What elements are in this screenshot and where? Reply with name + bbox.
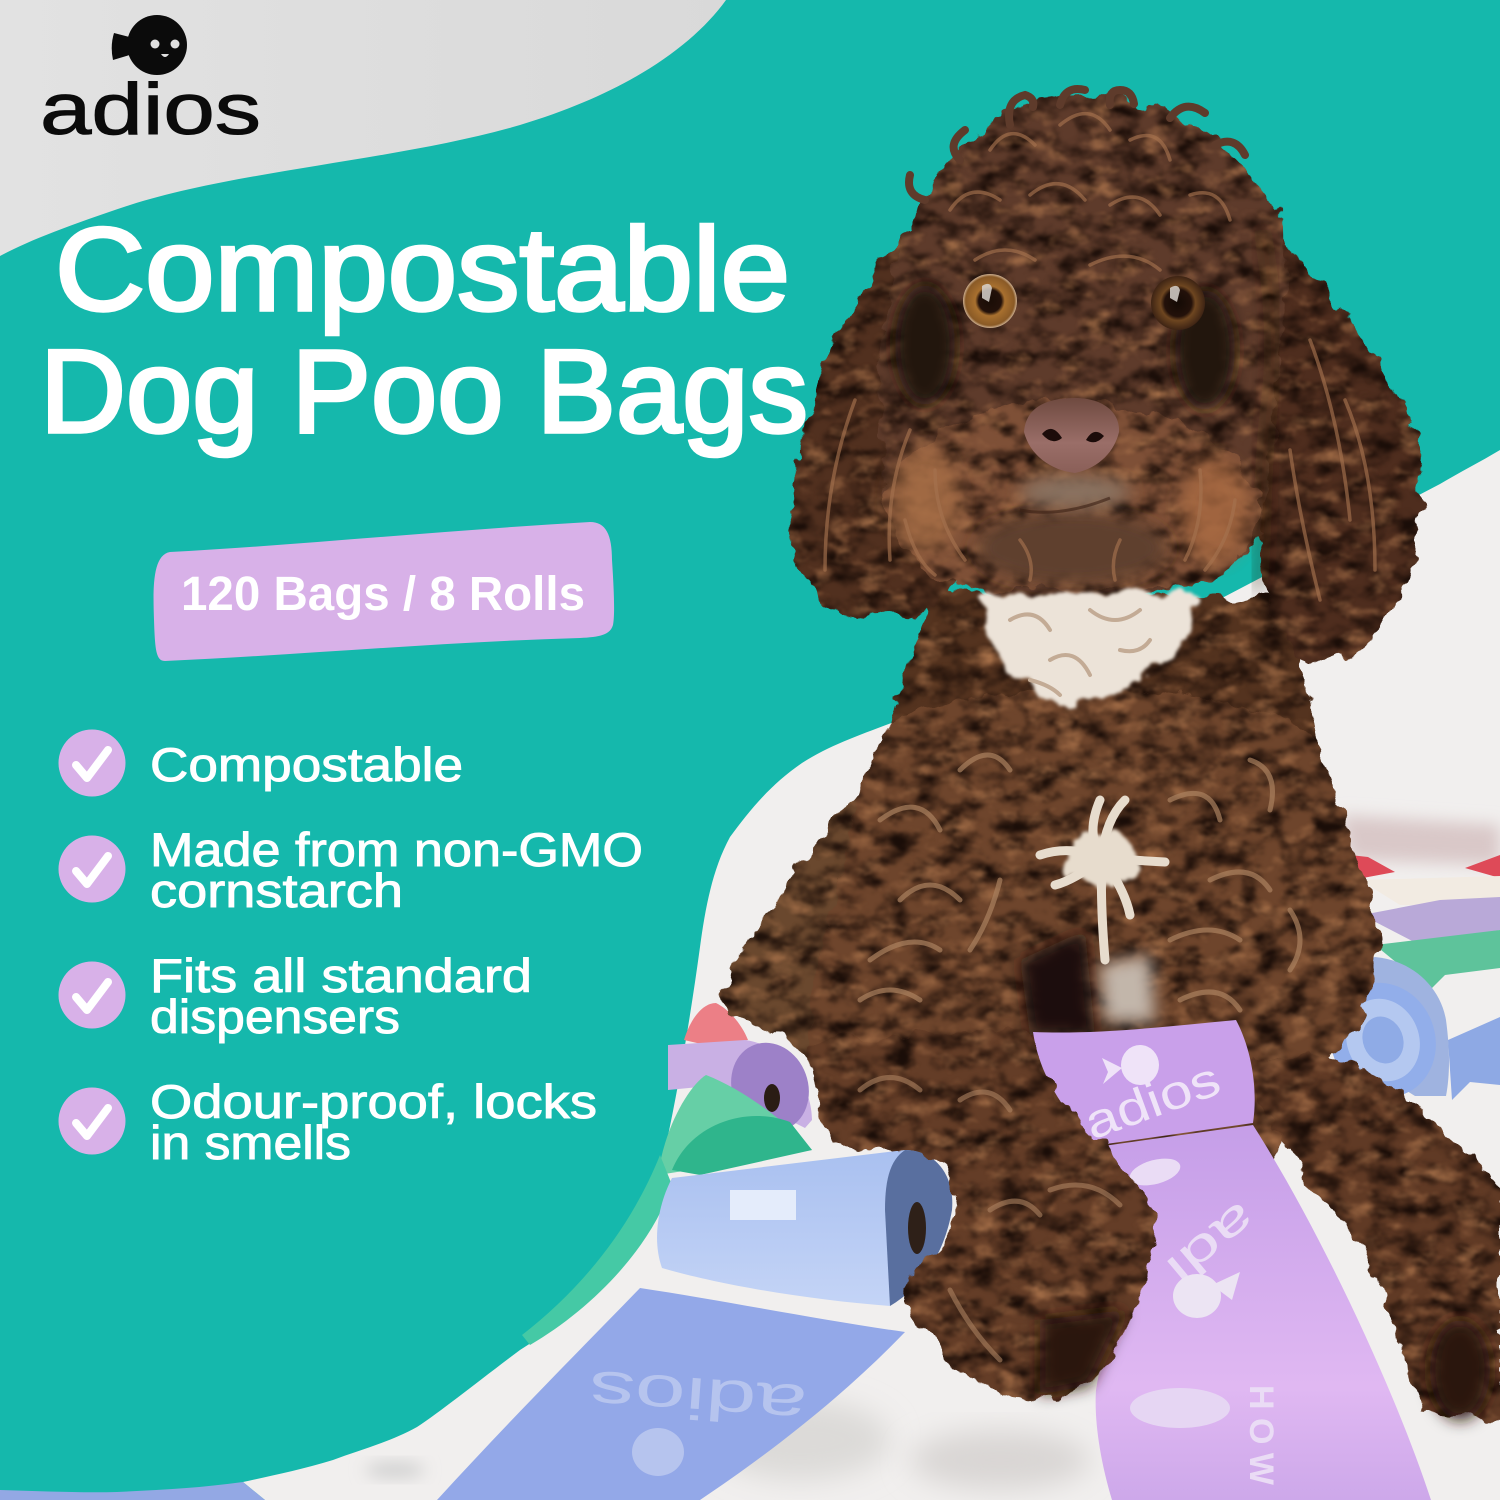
big purple roll <box>1033 1020 1255 1150</box>
grey top-left wave <box>0 0 726 256</box>
rear body and haunch <box>716 780 960 1060</box>
feature: compostable <box>58 730 463 796</box>
right eye <box>1151 276 1205 330</box>
blue bag strip <box>437 1288 905 1500</box>
grey lip fur <box>1020 476 1130 508</box>
side print: HOW <box>1242 1385 1280 1486</box>
toe shadow <box>1040 1310 1125 1395</box>
neck <box>880 590 1320 760</box>
feature list <box>58 730 643 1169</box>
left front leg and paw <box>809 1030 1156 1400</box>
feature: compostable: Compostable <box>150 738 463 791</box>
chin <box>977 512 1167 584</box>
white blanket and cushion photo area <box>0 450 1500 1500</box>
fish icon <box>112 15 187 75</box>
head fur strands <box>825 114 1375 600</box>
head and curls <box>881 94 1286 600</box>
lilac bag strip back right <box>1362 897 1500 945</box>
feature: fits dispensers: dispensers <box>150 990 400 1043</box>
low white patch <box>1100 955 1155 1022</box>
right paw shadow <box>1430 1320 1490 1420</box>
nose <box>1024 398 1119 473</box>
muzzle <box>885 400 1262 591</box>
chest tan strands <box>1010 610 1150 695</box>
blanket shadow left <box>710 1400 890 1480</box>
feature: non-GMO cornstarch <box>58 823 643 917</box>
dog <box>716 89 1500 1420</box>
feature: odour-proof <box>58 1075 597 1169</box>
fish print large <box>1173 1274 1221 1318</box>
cream blanket band <box>1360 876 1500 905</box>
feature: non-GMO cornstarch: Made from non-GMO <box>150 823 643 876</box>
roll rings <box>1313 967 1453 1113</box>
roll core <box>908 1202 926 1254</box>
feature: fits dispensers <box>58 949 532 1043</box>
left ear <box>792 235 985 618</box>
feature: fits dispensers: Fits all standard <box>150 949 532 1002</box>
mouth <box>1020 498 1110 512</box>
lilac bag strip <box>1096 1125 1431 1500</box>
blanket shadow bottom <box>910 1430 1090 1490</box>
title <box>40 204 808 458</box>
roll end <box>885 1150 952 1306</box>
white belly patch <box>1040 800 1165 960</box>
orange left jowl <box>891 448 959 552</box>
right front leg and paw <box>1250 1058 1500 1420</box>
roll label <box>730 1190 796 1220</box>
fish logo <box>1121 1045 1159 1085</box>
left eye <box>963 274 1017 328</box>
adios print: adi <box>1157 1192 1267 1296</box>
body <box>812 691 1380 1200</box>
flower print <box>1130 1388 1230 1428</box>
white chest <box>980 591 1200 706</box>
roll brand print: adios <box>1078 1053 1227 1150</box>
badge: 120 bags / 8 rolls: 120 Bags / 8 Rolls <box>181 568 585 621</box>
red blanket marks <box>1350 855 1500 880</box>
green bag strip back right <box>1375 930 1500 990</box>
blue roll right <box>1325 957 1449 1096</box>
wordmark: adios <box>40 70 261 150</box>
body fur strands <box>860 755 1300 1010</box>
title line two: Dog Poo Bags <box>40 326 808 458</box>
belly shadow <box>1020 930 1095 1035</box>
right ear <box>1243 225 1423 663</box>
small rolls on the left <box>522 1003 821 1345</box>
top curls <box>909 89 1245 200</box>
blanket shadow low left <box>365 1462 425 1478</box>
back rolls on the right <box>1313 957 1500 1113</box>
white belly strands <box>1040 800 1165 960</box>
feature: non-GMO cornstarch: cornstarch <box>150 864 403 917</box>
pink roll <box>684 1003 748 1046</box>
green roll <box>658 1075 812 1175</box>
fish print <box>1127 1154 1183 1190</box>
large blue roll <box>657 1150 952 1306</box>
eye highlights <box>982 284 1180 302</box>
dark patch by right eye <box>1175 290 1235 410</box>
purple roll <box>668 1040 812 1128</box>
orange right jowl <box>1181 458 1249 562</box>
feature: odour-proof: in smells <box>150 1116 351 1169</box>
leg strands <box>860 1078 1120 1360</box>
badge: 120 bags / 8 rolls <box>154 522 614 661</box>
green bag strip <box>522 1155 672 1345</box>
logo <box>40 15 261 150</box>
print on blue strip: adios <box>587 1358 809 1438</box>
cushion shadow band <box>1340 815 1500 865</box>
dark patch by left eye <box>895 285 955 405</box>
nostrils <box>1042 429 1104 442</box>
title line one: Compostable <box>55 204 790 336</box>
ear separation right <box>1258 230 1273 590</box>
blue bags far right <box>1448 1017 1500 1100</box>
feature: odour-proof: Odour-proof, locks <box>150 1075 597 1128</box>
fish on blue strip <box>632 1428 684 1476</box>
bottom left blue strip <box>0 1482 265 1500</box>
